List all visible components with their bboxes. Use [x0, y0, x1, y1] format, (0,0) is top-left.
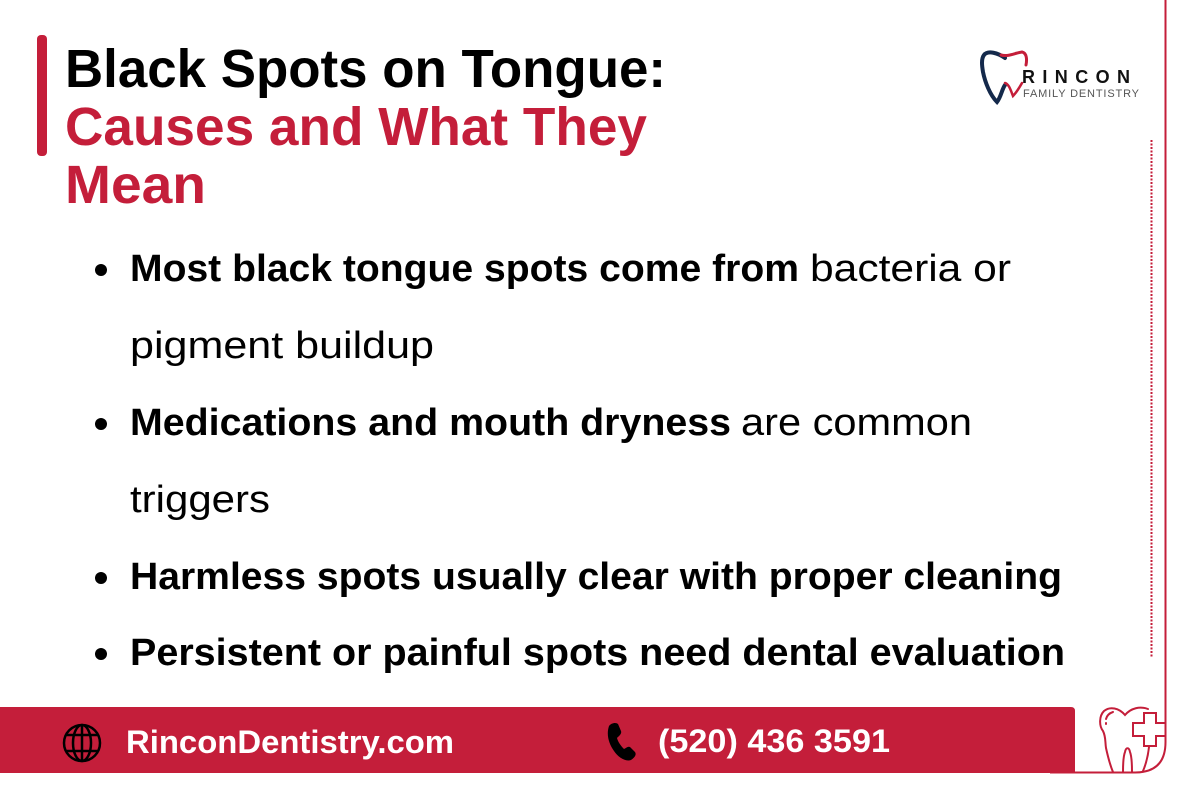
bullet 1	[95, 248, 1011, 367]
bullet 2: triggers	[130, 479, 270, 521]
dotted vertical line	[1150, 140, 1152, 658]
title: Causes and What They	[65, 97, 647, 157]
bullet 1: Most black tongue spots come from	[130, 248, 799, 290]
logo	[982, 52, 1140, 102]
website: RinconDentistry.com	[126, 724, 454, 760]
title: Mean	[65, 155, 206, 215]
phone number: (520) 436 3591	[658, 723, 890, 759]
title	[65, 39, 666, 215]
bullet 4: Persistent or painful spots need dental evaluation	[130, 632, 1065, 674]
icon: phone	[608, 723, 636, 760]
bullet list	[95, 248, 1065, 674]
footer bar	[0, 707, 1075, 773]
bullet 2: Medications and mouth dryness	[130, 402, 731, 444]
bullet 1: bacteria or	[810, 248, 1011, 290]
icon: globe	[64, 725, 100, 761]
title: Black Spots on Tongue:	[65, 39, 666, 99]
bullet 1: pigment buildup	[130, 325, 434, 367]
icon: tooth logo	[982, 52, 1027, 102]
bullet 2	[95, 402, 972, 521]
icon: tooth with cross	[1100, 708, 1165, 772]
page frame line	[1050, 0, 1166, 772]
logo wordmark: RINCON	[1022, 67, 1130, 87]
bullet 2: are common	[741, 402, 972, 444]
title accent bar	[37, 35, 47, 156]
logo tagline: FAMILY DENTISTRY	[1023, 88, 1140, 100]
bullet 3: Harmless spots usually clear with proper cleaning	[130, 556, 1062, 598]
